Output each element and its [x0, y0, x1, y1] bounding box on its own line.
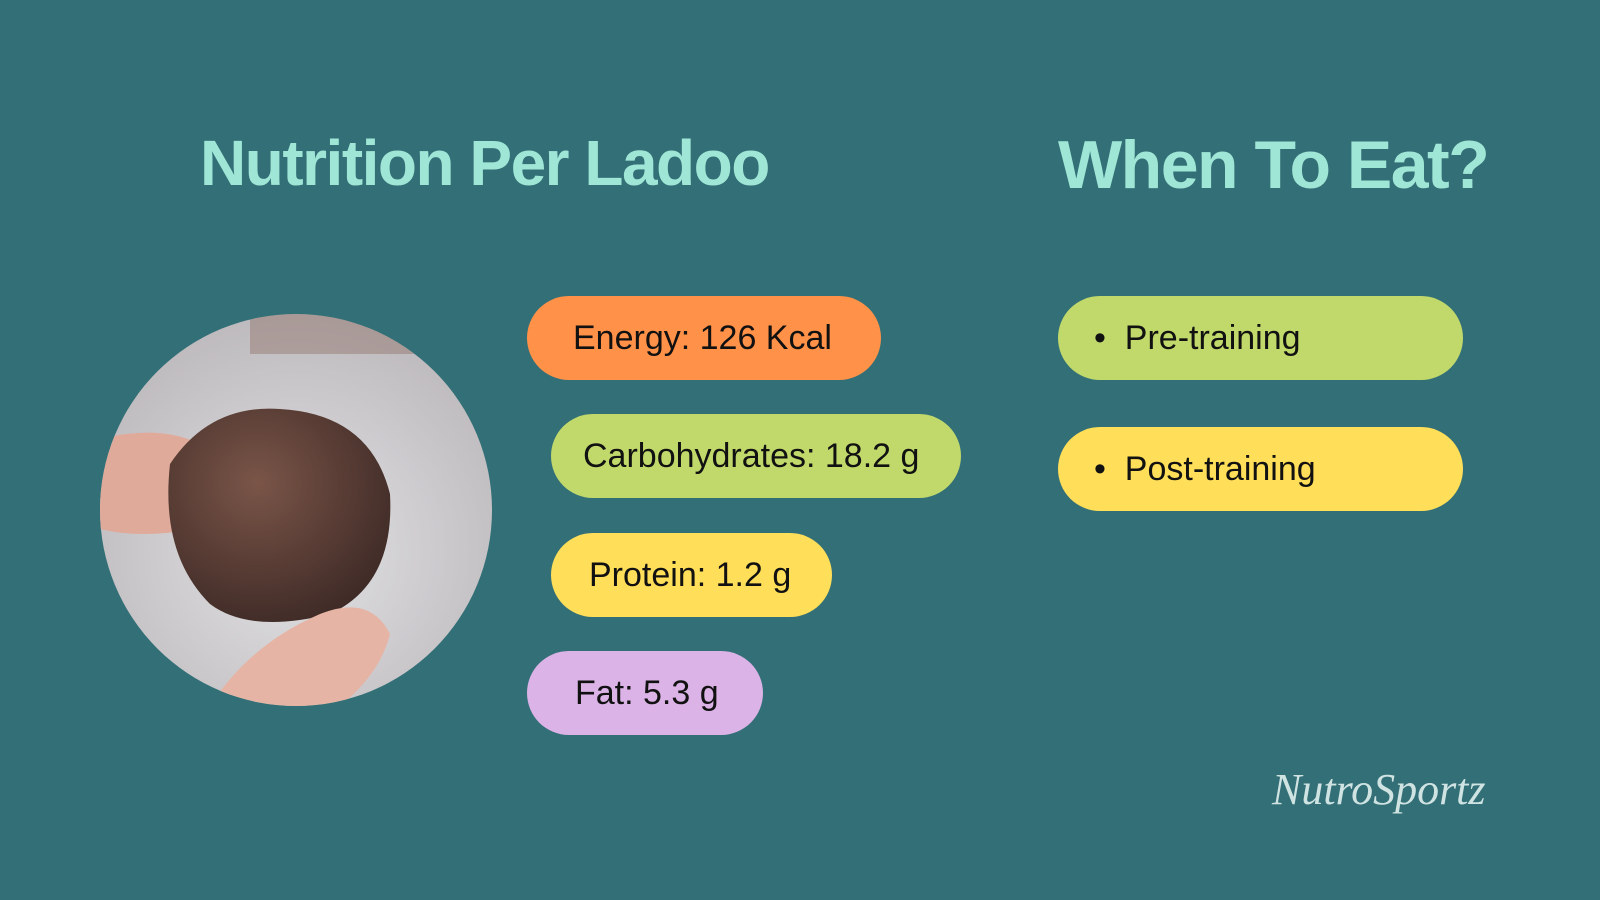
pill: energy: Energy: 126 Kcal [573, 318, 832, 356]
title: when to eat: When To Eat? [1058, 127, 1488, 203]
pill: carbohydrates: Carbohydrates: 18.2 g [583, 436, 919, 474]
pill: fat [527, 651, 763, 735]
pill: pre-training: • Pre-training [1094, 318, 1301, 356]
title: nutrition: Nutrition Per Ladoo [200, 127, 769, 199]
pill: protein [551, 533, 832, 617]
pill: post-training [1058, 427, 1463, 511]
pill: pre-training [1058, 296, 1463, 380]
pill: fat: Fat: 5.3 g [575, 674, 719, 712]
pill: energy [527, 296, 881, 380]
pill: protein: Protein: 1.2 g [589, 556, 791, 594]
logo: NutroSportz [1272, 765, 1486, 814]
pill: post-training: • Post-training [1094, 450, 1316, 488]
photo: ladoo [100, 314, 492, 706]
pill: carbohydrates [551, 414, 961, 498]
